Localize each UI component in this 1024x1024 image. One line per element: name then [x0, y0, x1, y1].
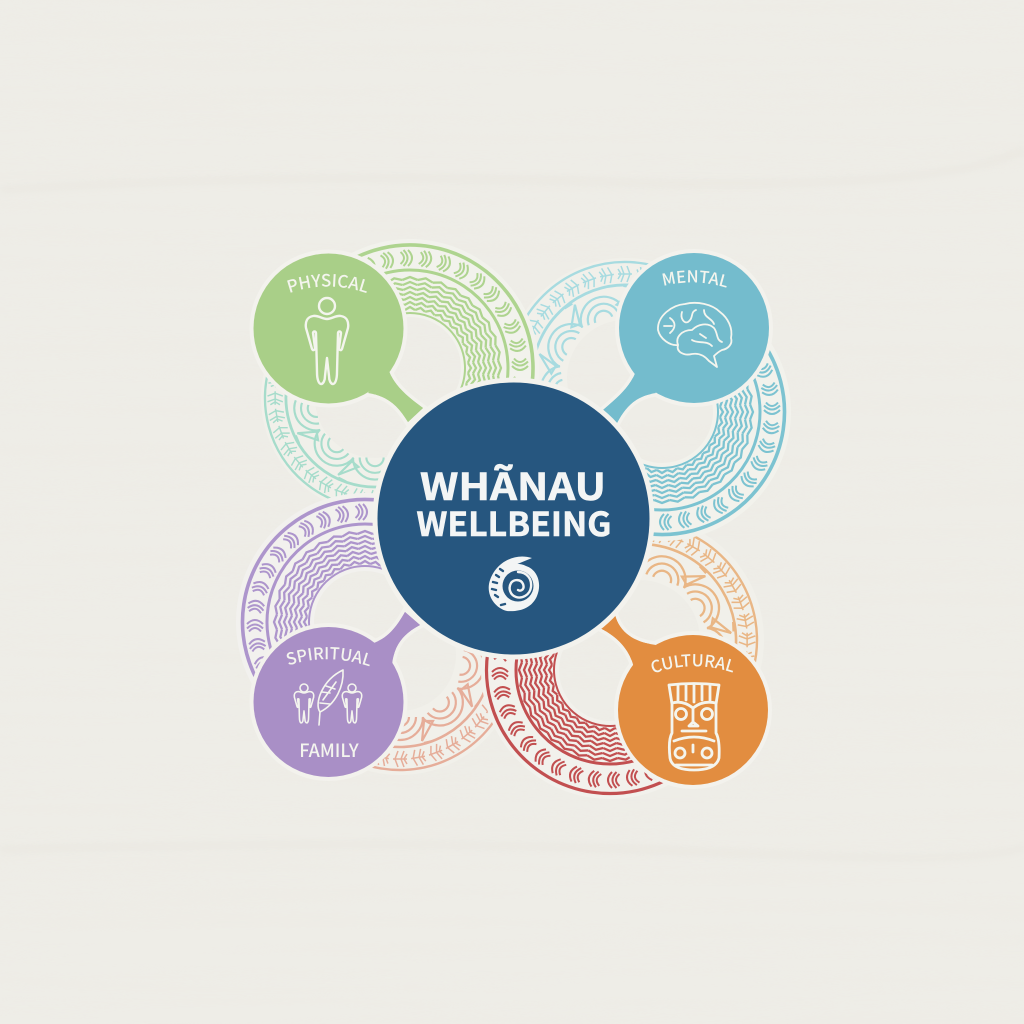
label: mental: MENTAL	[662, 270, 727, 288]
arc: teal tribal band	[264, 376, 385, 498]
arc: blue tribal band	[643, 350, 786, 541]
icon: human figure	[306, 298, 348, 384]
label: physical: PHYSICAL	[287, 274, 367, 293]
title: whanau: WHÃNAU	[420, 457, 606, 511]
arc: red tribal band	[481, 652, 664, 796]
bubble: spiritual family	[254, 612, 420, 777]
icon: brain	[658, 303, 731, 367]
bubble: mental	[603, 253, 770, 423]
label: cultural: CULTURAL	[652, 654, 733, 672]
title: wellbeing: WELLBEING	[416, 498, 612, 546]
bubble: physical	[254, 254, 423, 422]
icon: koru spiral	[489, 557, 539, 611]
center circle	[378, 382, 650, 654]
icon: two people and feather	[294, 670, 362, 725]
label: family: FAMILY	[299, 737, 359, 763]
bubble: cultural	[601, 616, 768, 785]
icon: tiki mask	[669, 684, 719, 770]
arc: green tribal band	[357, 243, 538, 388]
arc: purple tribal band	[240, 493, 382, 677]
arc: pale blue tribal band	[527, 260, 649, 384]
arc: peach tribal band	[372, 650, 493, 772]
label: spiritual: SPIRITUAL	[286, 647, 370, 666]
arc: orange tribal band	[645, 536, 758, 662]
